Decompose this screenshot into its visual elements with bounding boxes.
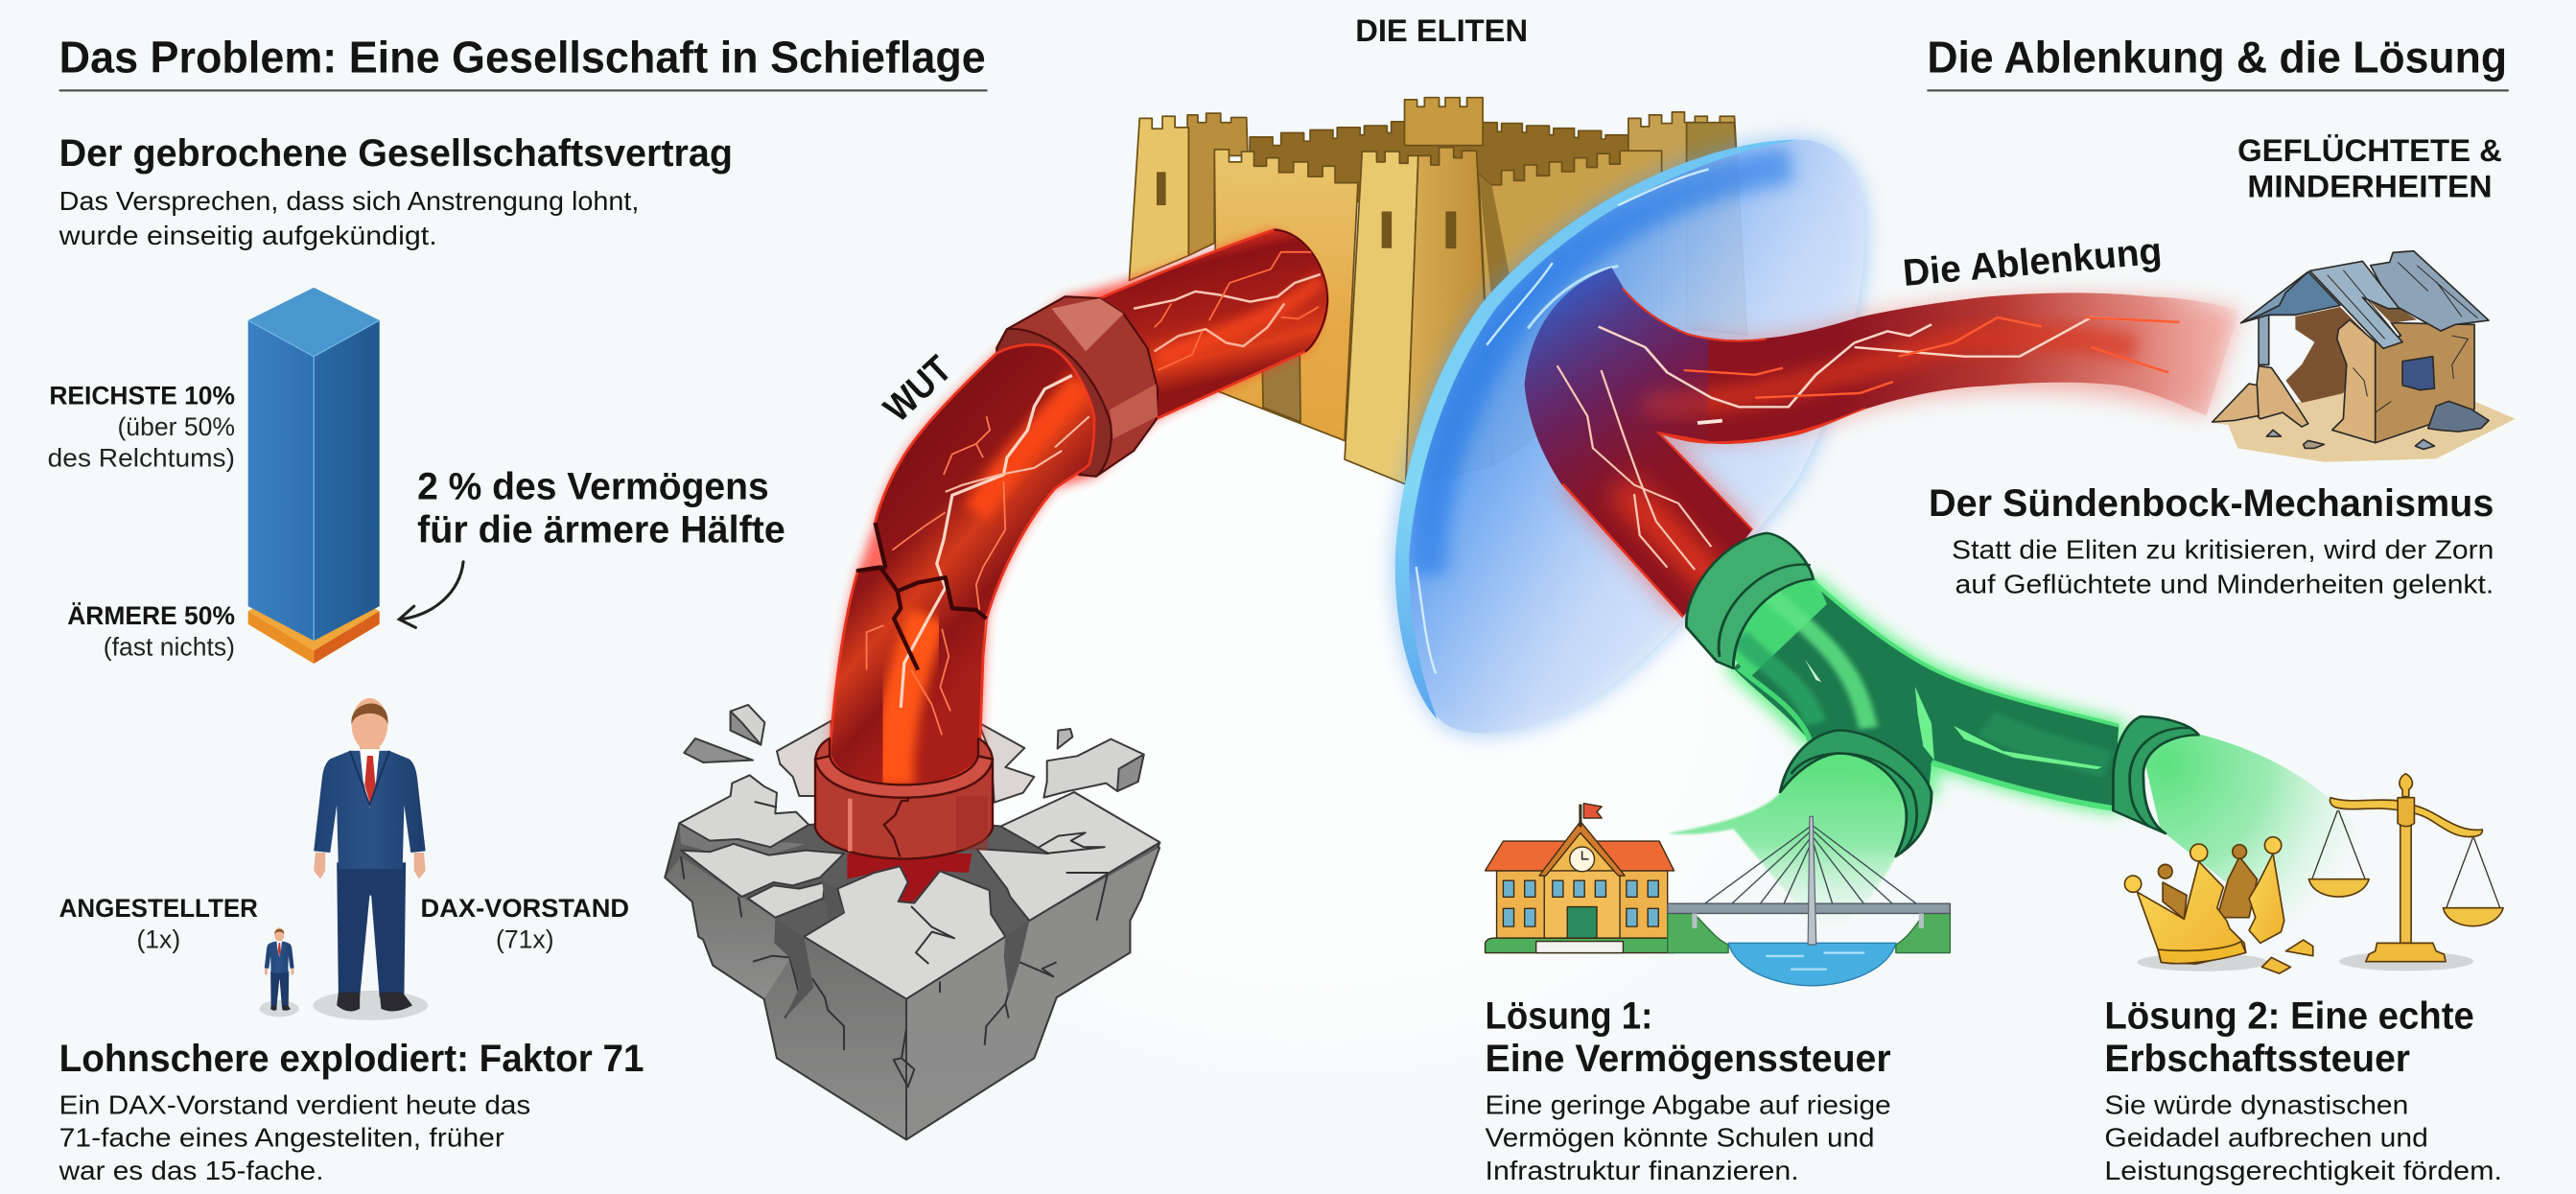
icon: CEO figure	[313, 698, 428, 1020]
figure labels: ANGESTELLTER	[59, 894, 258, 923]
rock dark fissures	[774, 879, 1029, 1018]
callout: two percent: 2 % des Vermögens	[417, 466, 769, 508]
castle centre back tower	[1405, 98, 1483, 146]
pipe collar at ground	[815, 738, 993, 859]
icon: bridge	[1668, 816, 1950, 986]
text block: scapegoat mechanism	[1929, 482, 2494, 598]
text block: solution 2: Sie würde dynastischen	[2104, 1089, 2408, 1119]
rock top slabs	[679, 775, 1159, 921]
icon: broken crown	[2124, 837, 2313, 973]
figure labels: (1x)	[136, 925, 180, 953]
label: elites: DIE ELITEN	[1355, 13, 1528, 48]
central white haze	[855, 329, 1774, 1051]
rock body	[665, 792, 1159, 1139]
text block: solution 2: Lösung 2: Eine echte	[2104, 995, 2474, 1037]
green glow	[1733, 581, 2119, 808]
castle rear walls and courtyard	[1250, 122, 1628, 201]
figure labels: DAX-VORSTAND	[421, 894, 629, 923]
text block: solution 1	[1486, 995, 1891, 1185]
text block: wage gap: Ein DAX-Vorstand verdient heute das	[59, 1089, 530, 1119]
text block: broken social contract: Der gebrochene Gesellschaftsvertrag	[59, 132, 733, 175]
orange base: poorer half	[248, 575, 380, 664]
castle front right wall	[1479, 151, 1662, 466]
blue column: richest tenth	[248, 288, 380, 641]
text block: scapegoat mechanism: auf Geflüchtete und Minderheiten gelenkt.	[1955, 569, 2494, 598]
arrow pipe: anger diverted to the scapegoats	[1511, 263, 2239, 618]
text block: wage gap	[59, 1038, 644, 1185]
text block: solution 2: Leistungsgerechtigkeit fördem.	[2104, 1156, 2502, 1185]
label: refugees and minorities: MINDERHEITEN	[2247, 170, 2493, 204]
text block: solution 2: Geidadel aufbrechen und	[2104, 1123, 2428, 1153]
castle front tower	[1345, 148, 1493, 484]
label: refugees and minorities	[2237, 133, 2502, 204]
pipe coupling school branch	[1780, 730, 1932, 856]
text block: broken social contract: wurde einseitig aufgekündigt.	[59, 221, 437, 250]
castle right back tower	[1628, 112, 1746, 335]
text block: scapegoat mechanism: Der Sündenbock-Mechanismus	[1929, 482, 2494, 525]
right section heading: Die Ablenkung & die Lösung	[1927, 32, 2507, 82]
text block: broken social contract	[59, 132, 733, 250]
text block: wage gap: Lohnschere explodiert: Faktor 71	[59, 1038, 644, 1080]
text block: solution 1: Vermögen könnte Schulen und	[1486, 1123, 1875, 1153]
figure labels: (71x)	[496, 925, 554, 953]
icon: ruined shelter	[2211, 251, 2516, 462]
text block: solution 1: Lösung 1:	[1486, 995, 1652, 1037]
pipe ring band	[996, 296, 1158, 477]
red glow	[830, 230, 1319, 754]
callout: two percent	[417, 466, 785, 550]
blue shield of distraction	[1395, 140, 1864, 733]
icon: school	[1486, 804, 1674, 953]
text label: die Ablenkung: Die Ablenkung	[1901, 230, 2164, 294]
castle front left wall	[1214, 150, 1358, 441]
label: refugees and minorities: GEFLÜCHTETE &	[2237, 133, 2502, 168]
text block: broken social contract: Das Versprechen, dass sich Anstrengung lohnt,	[59, 186, 639, 216]
text block: scapegoat mechanism: Statt die Eliten zu kritisieren, wird der Zorn	[1952, 534, 2494, 564]
green pipe highlights	[1739, 581, 2119, 808]
bar labels: (fast nichts)	[104, 632, 235, 661]
pipe coupling top	[1686, 533, 1814, 668]
lightning on diverted pipe	[1557, 317, 2179, 570]
text label: WUT: WUT	[876, 348, 960, 431]
solution flow to school and bridge	[1667, 753, 1907, 934]
rock front slab	[804, 866, 1005, 999]
text block: solution 2	[2104, 995, 2502, 1185]
arrow: callout to base	[399, 562, 463, 627]
text block: solution 1: Infrastruktur finanzieren.	[1486, 1156, 1799, 1185]
text block: solution 1: Eine Vermögenssteuer	[1486, 1038, 1891, 1080]
rock cracks	[681, 802, 1108, 1087]
callout: two percent: für die ärmere Hälfte	[417, 508, 785, 550]
bar labels	[48, 381, 235, 661]
arrow pipe: green solutions	[1667, 533, 2198, 934]
chart: wealth distribution bar	[248, 288, 380, 664]
text block: solution 1: Eine geringe Abgabe auf riesige	[1486, 1089, 1891, 1119]
figure labels	[59, 894, 629, 953]
pipe coupling right branch	[2113, 716, 2198, 833]
text block: solution 2: Erbschaftssteuer	[2104, 1038, 2410, 1080]
bar labels: (über 50%	[117, 412, 235, 441]
icon: scales of justice	[2308, 774, 2503, 971]
green pipe body	[1733, 581, 2119, 808]
icon: castle of the elites	[1129, 98, 1746, 484]
rock fissure below pipe	[847, 854, 972, 908]
left section heading: Das Problem: Eine Gesellschaft in Schieflage	[59, 32, 986, 82]
icon: cracked rock base	[665, 705, 1159, 1139]
text block: wage gap: 71-fache eines Angesteliten, früher	[59, 1123, 504, 1153]
bar labels: REICHSTE 10%	[49, 381, 235, 410]
rock flying fragments	[684, 705, 1144, 798]
bar labels: des Relchtums)	[48, 443, 235, 472]
upper pipe section	[1096, 230, 1327, 418]
lower pipe section	[830, 344, 1094, 787]
text block: wage gap: war es das 15-fache.	[59, 1156, 323, 1185]
icon: employee figure	[260, 927, 299, 1017]
solution flow fade 2	[2136, 723, 2357, 945]
bar labels: ÄRMERE 50%	[67, 601, 235, 630]
rock back slabs	[777, 721, 1034, 803]
green pipe opening fill	[1720, 558, 1827, 677]
castle left back tower	[1129, 113, 1248, 281]
arrow pipe: anger rising from the ground	[830, 230, 1327, 787]
